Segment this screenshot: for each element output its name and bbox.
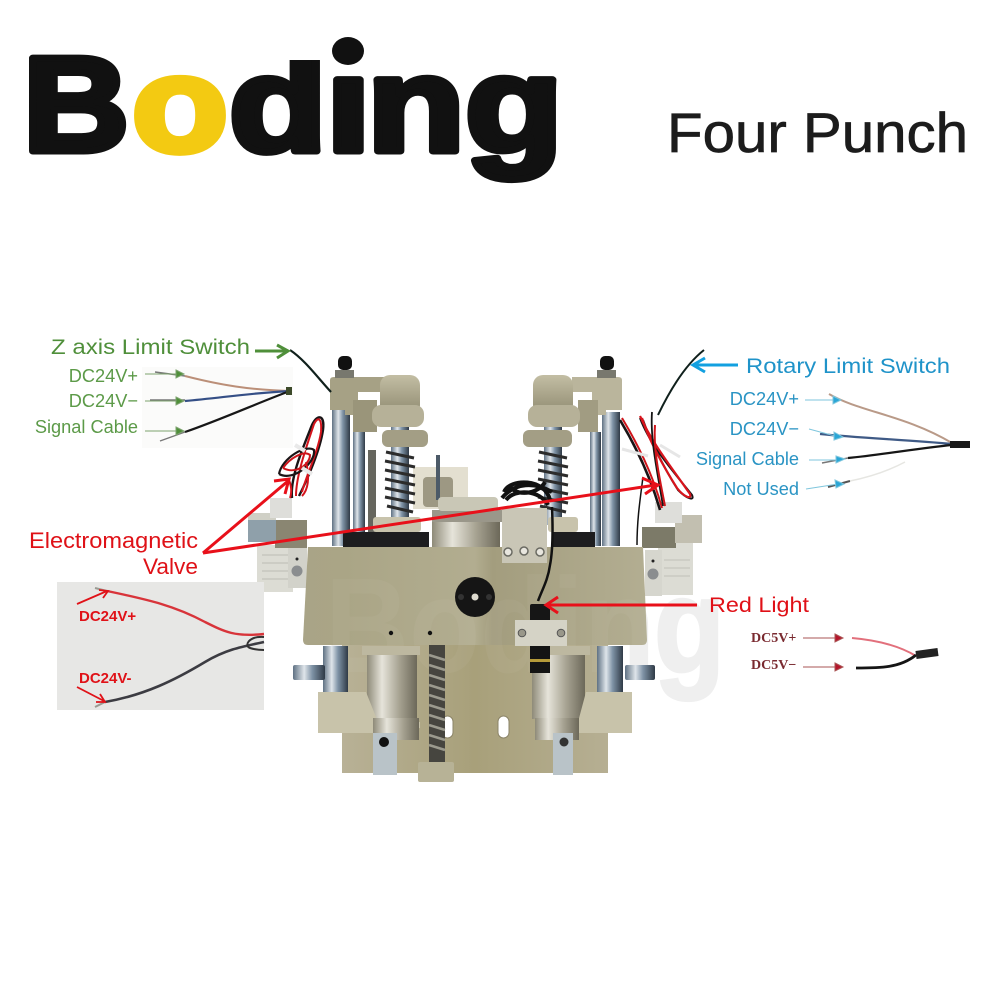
rear bracket and pin <box>413 455 468 509</box>
top left arm <box>330 356 424 432</box>
Z axis wires <box>150 372 292 441</box>
arrows: Electromagnetic Valve <box>203 478 658 553</box>
logo: Boding: g <box>465 29 563 180</box>
watermark over housing: Bodin <box>325 550 655 701</box>
arrow: Red Light <box>546 597 697 613</box>
central pulley <box>432 497 502 548</box>
labels: rotary wires: Not Used <box>723 479 799 499</box>
red light labels: DC5V− <box>751 658 796 673</box>
round black port <box>455 577 495 617</box>
panel: red light wiring <box>751 631 938 673</box>
red light labels <box>751 631 796 673</box>
panel: Z axis wiring <box>142 367 293 448</box>
panel: valve wiring photo <box>57 582 264 710</box>
watermark: Boding: Boding <box>325 550 725 701</box>
red light module <box>515 507 567 673</box>
central lead screw <box>418 645 454 782</box>
threaded screw and spring, right <box>523 425 572 525</box>
top bracket <box>502 508 547 563</box>
panel: rotary wiring <box>805 394 970 489</box>
label: Electromagnetic Valve <box>29 528 198 579</box>
labels: rotary wires: DC24V+ <box>730 389 799 409</box>
label: Electromagnetic Valve: Electromagnetic <box>29 528 198 553</box>
arrow: rotary <box>693 358 738 372</box>
logo: Boding: i <box>326 29 371 180</box>
logo: Boding: n <box>367 29 465 180</box>
label: Electromagnetic Valve: Valve <box>143 554 198 579</box>
rotary wire <box>658 350 704 415</box>
threaded screw and spring, left <box>382 425 428 525</box>
left valve <box>248 498 307 592</box>
machine: four punch head <box>248 356 702 782</box>
red light labels: DC5V+ <box>751 631 796 646</box>
heading: Z axis Limit Switch: Z axis Limit Switch <box>51 335 250 359</box>
lower right punch <box>532 646 655 775</box>
guide rods <box>332 410 620 546</box>
solenoid wires, left <box>279 417 323 498</box>
drive belts and collars <box>343 517 595 548</box>
labels: Z axis wires: DC24V+ <box>69 366 138 386</box>
rotary wires <box>820 394 970 487</box>
labels: Z axis wires: DC24V− <box>69 391 138 411</box>
logo: Boding: B <box>23 29 129 180</box>
valve wire labels <box>79 608 136 687</box>
labels: rotary wires: Signal Cable <box>696 449 799 469</box>
right valve <box>637 477 702 596</box>
rotary pointers <box>805 396 845 489</box>
mounting slots <box>442 716 509 738</box>
back plate <box>342 640 608 773</box>
arrow: Z axis <box>255 345 288 358</box>
solenoid wires, right <box>620 412 693 510</box>
red light pointers <box>803 634 843 671</box>
z axis wire <box>290 350 331 392</box>
valve wire labels: DC24V- <box>79 670 132 687</box>
logo: Boding: o <box>132 29 228 180</box>
heading: Rotary Limit Switch: Rotary Limit Switch <box>746 354 950 378</box>
Z axis pointers <box>145 370 184 435</box>
lower left punch <box>293 646 420 775</box>
labels: Z axis wires: Signal Cable <box>35 417 138 437</box>
labels: rotary wires: DC24V− <box>730 419 799 439</box>
label: Red Light: Red Light <box>709 594 809 617</box>
housing holes <box>389 631 432 635</box>
logo: Boding: d <box>229 29 327 180</box>
red light wires <box>852 638 938 668</box>
black cable coil <box>502 482 552 505</box>
valve wire labels: DC24V+ <box>79 608 136 625</box>
main housing <box>303 547 647 645</box>
valve wires <box>95 588 107 591</box>
logo: Boding <box>23 29 563 180</box>
title: Four Punch: Four Punch <box>667 101 968 164</box>
valve wire pointers <box>77 590 108 702</box>
labels: Z axis wires <box>35 366 138 437</box>
labels: rotary wires <box>696 389 799 499</box>
top right arm <box>528 356 622 432</box>
